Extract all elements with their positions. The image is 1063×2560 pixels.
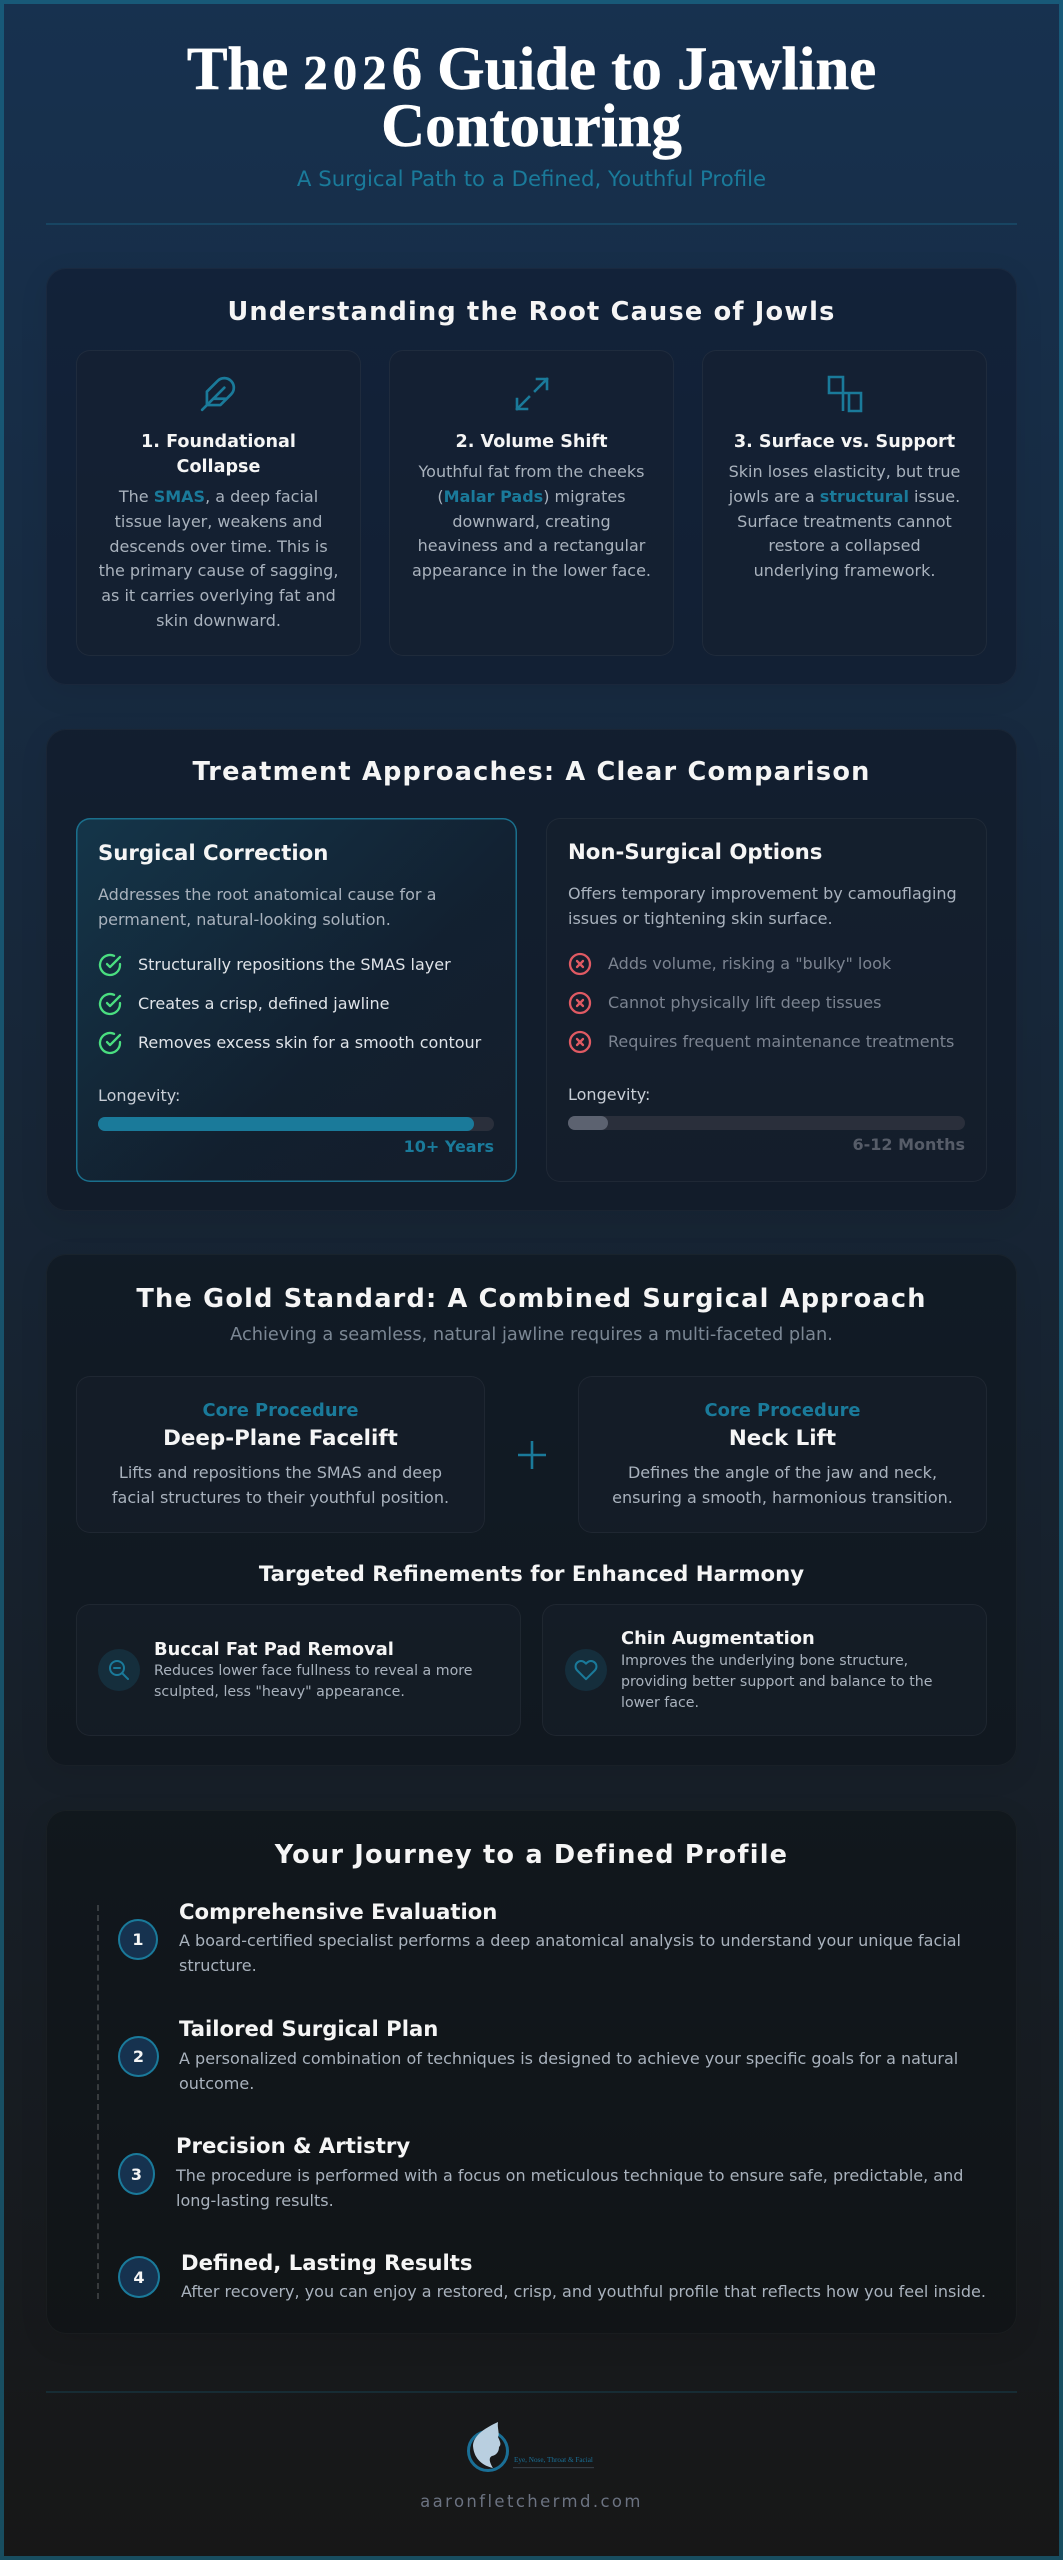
number: 2 (133, 2047, 144, 2066)
text: Reduces lower face fullness to reveal a more (154, 1663, 473, 1679)
text: Lifts and repositions the SMAS and deep (119, 1463, 442, 1482)
step text (176, 2166, 963, 2210)
subheading: refinements: Targeted Refinements for Enhanced Harmony (259, 1562, 804, 1587)
step text: long-lasting results. (176, 2191, 334, 2210)
longevity bar (568, 1116, 965, 1130)
step text: structure. (179, 1956, 257, 1975)
heading: Treatment Approaches: A Clear Comparison (192, 757, 871, 787)
icon: x (568, 992, 592, 1014)
text (154, 1663, 473, 1700)
drawback list (568, 952, 954, 1054)
icon: heart (565, 1649, 607, 1691)
number: 3 (131, 2164, 142, 2184)
icon: squares (828, 376, 862, 412)
card text: appearance in the lower face. (412, 561, 651, 580)
card: non-surgical options (546, 818, 987, 1182)
step text (179, 2049, 958, 2093)
step text: A personalized combination of techniques is designed to achieve your specific goals for a natural (179, 2049, 958, 2068)
description: permanent, natural-looking solution. (98, 910, 391, 929)
label: Core Procedure (704, 1400, 861, 1421)
title: Chin Augmentation (621, 1628, 815, 1649)
card text: jowls are a structural issue. (729, 487, 960, 506)
footer (420, 2422, 643, 2511)
card: buccal fat pad removal (76, 1604, 521, 1736)
card text: (Malar Pads) migrates (437, 487, 626, 506)
drawback: Adds volume, risking a "bulky" look (608, 954, 891, 973)
longevity value: 10+ Years (404, 1137, 494, 1156)
text (112, 1463, 449, 1507)
card text: descends over time. This is (109, 537, 328, 556)
step text: outcome. (179, 2074, 254, 2093)
card text: Youthful fat from the cheeks (418, 462, 644, 481)
number (118, 2153, 155, 2195)
step text: After recovery, you can enjoy a restored, crisp, and youthful profile that reflects how you feel inside. (181, 2282, 986, 2301)
step title: Comprehensive Evaluation (179, 1899, 497, 1924)
title: Deep-Plane Facelift (163, 1426, 398, 1451)
card: foundational collapse (76, 350, 361, 656)
panel: treatment comparison (46, 729, 1017, 1211)
card text: as it carries overlying fat and (101, 586, 336, 605)
longevity value: 6-12 Months (853, 1135, 965, 1154)
icon: feather (200, 376, 236, 412)
longevity bar (98, 1117, 494, 1131)
card text: Skin loses elasticity, but true (729, 462, 960, 481)
card: surgical correction (76, 818, 517, 1182)
title: Contouring (381, 93, 682, 160)
title: The 2026 Guide to Jawline (187, 36, 876, 103)
card: chin augmentation (542, 1604, 987, 1736)
heading: Your Journey to a Defined Profile (275, 1840, 788, 1870)
step text: The procedure is performed with a focus on meticulous technique to ensure safe, predictable, and (176, 2166, 963, 2185)
step 1 (118, 1899, 961, 1975)
card text: heaviness and a rectangular (418, 536, 645, 555)
description: issues or tightening skin surface. (568, 909, 833, 928)
number (118, 2036, 159, 2077)
subtitle: A Surgical Path to a Defined, Youthful Profile (297, 167, 766, 192)
logo: Eye, Nose, Throat & Facial (514, 2456, 593, 2464)
card title: 2. Volume Shift (455, 432, 608, 452)
card: volume shift (389, 350, 674, 656)
icon: check (98, 1032, 122, 1054)
card title: Collapse (177, 457, 260, 477)
step 4 (118, 2250, 986, 2301)
title (187, 36, 876, 160)
card text: Surface treatments cannot (737, 512, 952, 531)
text (612, 1463, 953, 1507)
icon: zoom out (98, 1649, 140, 1691)
number: 4 (133, 2268, 145, 2286)
text: facial structures to their youthful position. (112, 1488, 449, 1507)
title: Surgical Correction (98, 841, 328, 866)
timeline line (97, 1905, 99, 2299)
description (98, 885, 436, 929)
icon: check (98, 954, 122, 976)
label: Core Procedure (202, 1400, 359, 1421)
panel: combined surgical approach (46, 1254, 1017, 1766)
card text: restore a collapsed (768, 536, 921, 555)
panel: patient journey (46, 1810, 1017, 2334)
number (118, 1919, 158, 1960)
card text (728, 462, 960, 580)
icon: x (568, 1030, 592, 1054)
drawback: Cannot physically lift deep tissues (608, 993, 881, 1012)
text: ensuring a smooth, harmonious transition. (612, 1488, 953, 1507)
text (621, 1653, 933, 1711)
logo (467, 2422, 594, 2472)
card text: downward, creating (452, 512, 611, 531)
panel: root cause of jowls (46, 268, 1017, 685)
longevity label: Longevity: (568, 1085, 650, 1104)
description: Offers temporary improvement by camouflaging (568, 884, 957, 903)
icon: x (568, 952, 592, 976)
card text: skin downward. (156, 611, 281, 630)
card title: 3. Surface vs. Support (734, 432, 955, 452)
drawback: Requires frequent maintenance treatments (608, 1032, 954, 1051)
heading: The Gold Standard: A Combined Surgical Approach (136, 1284, 927, 1314)
text: providing better support and balance to the (621, 1674, 933, 1690)
number: 1 (132, 1930, 144, 1949)
icon: expand arrows (515, 377, 549, 411)
card text: the primary cause of sagging, (99, 561, 338, 580)
longevity label: Longevity: (98, 1086, 180, 1105)
card text: tissue layer, weakens and (115, 512, 322, 531)
heading: Understanding the Root Cause of Jowls (227, 297, 836, 327)
title: Neck Lift (729, 1426, 836, 1451)
icon: check (98, 992, 122, 1016)
card: neck lift (578, 1376, 987, 1533)
text: sculpted, less "heavy" appearance. (154, 1684, 405, 1700)
benefit: Removes excess skin for a smooth contour (138, 1033, 481, 1052)
text: lower face. (621, 1695, 699, 1711)
benefit list (98, 954, 482, 1054)
step 3 (118, 2133, 963, 2210)
card title: 1. Foundational (141, 432, 296, 452)
icon: plus (518, 1441, 546, 1469)
website: aaronfletchermd.com (420, 2492, 643, 2511)
card text: The SMAS, a deep facial (119, 487, 318, 506)
text: Improves the underlying bone structure, (621, 1653, 908, 1669)
card title (141, 432, 296, 477)
benefit: Structurally repositions the SMAS layer (138, 955, 451, 974)
card: deep-plane facelift (76, 1376, 485, 1533)
card: surface vs support (702, 350, 987, 656)
subheading: Achieving a seamless, natural jawline requires a multi-faceted plan. (230, 1325, 833, 1345)
header (187, 36, 876, 192)
title: Buccal Fat Pad Removal (154, 1639, 394, 1660)
text: Defines the angle of the jaw and neck, (628, 1463, 937, 1482)
step text: A board-certified specialist performs a deep anatomical analysis to understand your unique facial (179, 1931, 961, 1950)
description: Addresses the root anatomical cause for a (98, 885, 436, 904)
title: Non-Surgical Options (568, 840, 822, 865)
card text (99, 487, 338, 630)
step 2 (118, 2016, 958, 2093)
step title: Defined, Lasting Results (181, 2250, 473, 2275)
card text (412, 462, 651, 580)
number (118, 2256, 160, 2298)
benefit: Creates a crisp, defined jawline (138, 994, 389, 1013)
step title: Tailored Surgical Plan (179, 2016, 438, 2041)
step title: Precision & Artistry (176, 2133, 410, 2158)
description (568, 884, 957, 928)
step text (179, 1931, 961, 1975)
card text: underlying framework. (754, 561, 935, 580)
